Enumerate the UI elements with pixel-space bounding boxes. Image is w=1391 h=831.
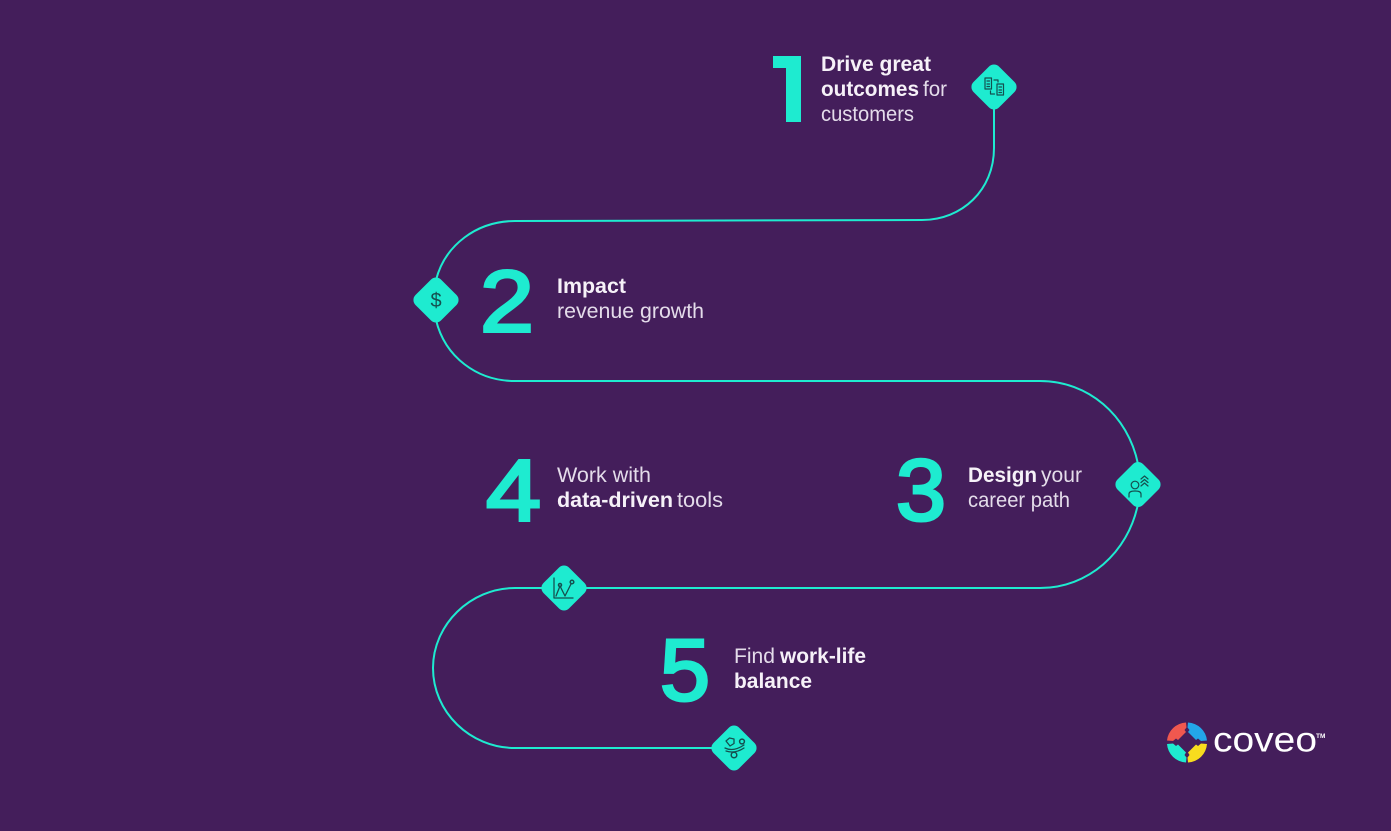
text: step 3: Design [968,463,1037,487]
step 1 [773,56,947,122]
logo: coveo [1167,720,1325,762]
number 1 [773,56,801,122]
trademark: TM [1316,733,1325,740]
text: step 4: data-driven [557,488,673,512]
icon: line chart [539,563,589,613]
text: step 1: Drive great [821,52,931,76]
number 2: 2 [480,254,534,350]
text: step 2: Impact [557,274,626,298]
number 1: 1 [768,40,819,142]
logo mark [1167,722,1207,762]
icon: dollar: $ [430,290,442,312]
text: step 4: Work with [557,463,651,487]
step 5 [660,622,866,719]
text: step 4: tools [677,488,723,512]
step 4 [486,442,723,540]
icon: person and chevrons [1113,459,1163,510]
text: step 5: Find [734,644,775,668]
step 2 [480,254,704,350]
text: step 5: balance [734,669,812,693]
icon: dollar [411,275,461,325]
icon: balance [709,723,759,773]
text: step 3: career path [968,488,1070,512]
number 3: 3 [896,442,946,539]
winding path [433,108,1138,748]
text: step 3: your [1041,463,1082,487]
text: step 1: outcomes [821,77,919,101]
number 5: 5 [660,622,710,719]
text: step 2: revenue growth [557,299,704,323]
text: step 1: for [923,77,947,101]
text: step 5: work-life [779,644,866,668]
step 3 [896,442,1082,539]
logo wordmark: coveo [1213,720,1317,760]
icon: documents exchange [969,62,1019,112]
text: step 1: customers [821,102,914,126]
number 4: 4 [486,442,541,540]
